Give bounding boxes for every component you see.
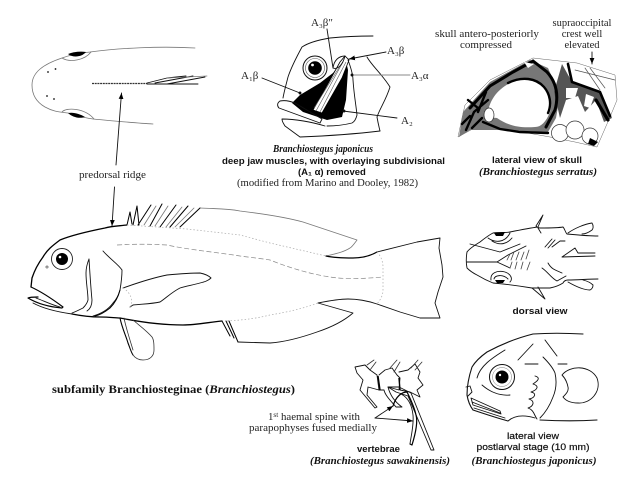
head outline — [283, 36, 373, 98]
upper jaw — [278, 101, 322, 123]
head outline — [32, 47, 195, 124]
eye — [52, 248, 72, 270]
preopercle and opercle outlines — [327, 57, 390, 131]
white muscle pad near eye — [333, 56, 345, 68]
species name: Branchiostegus japonicus — [272, 143, 373, 155]
skull pale body — [458, 58, 617, 147]
caption line 2: deep jaw muscles, with overlaying subdivisional — [222, 156, 445, 167]
arrow: predorsal ridge to fish — [112, 187, 114, 226]
lateral squiggles — [542, 239, 566, 281]
body outline upper — [31, 225, 127, 287]
species name: (Branchiostegus japonicus) — [472, 456, 596, 467]
caption line 2: postlarval stage (10 mm) — [476, 442, 590, 453]
label: A3 beta: A₃β — [387, 45, 405, 57]
eye — [303, 56, 327, 80]
note: supraoccipital crest: crest well — [562, 29, 602, 40]
nostril — [46, 266, 48, 268]
species name: (Branchiostegus sawakinensis) — [310, 456, 450, 467]
label: A1 beta: A₁β — [241, 70, 259, 82]
centrum thick edges — [378, 376, 400, 390]
head lines — [482, 340, 567, 421]
ventral fin — [120, 318, 154, 360]
label: A3 alpha: A₃α — [411, 70, 429, 82]
pectoral base — [123, 288, 132, 307]
operculum — [93, 251, 122, 316]
nostrils — [46, 68, 56, 100]
branchiostegal rays — [528, 376, 538, 419]
arrow: to parapophysis two — [375, 418, 413, 421]
mouth — [28, 287, 72, 314]
left and roof mottled region — [459, 60, 560, 137]
vertebra 1 — [355, 365, 379, 408]
note: compressed skull — [435, 29, 540, 51]
arrow: predorsal ridge to head view — [116, 93, 122, 165]
caption: dorsal view: dorsal view — [512, 306, 568, 317]
pectoral fin — [123, 273, 211, 307]
head outline — [467, 333, 597, 421]
dorsal fin base dotted — [127, 225, 326, 256]
caption line: lateral view of skull — [492, 155, 582, 166]
dark bones — [462, 61, 615, 133]
preoperculum — [72, 259, 92, 313]
head inner line — [466, 350, 505, 396]
dorsal fin — [562, 248, 595, 257]
tail base dotted — [377, 252, 383, 304]
title: subfamily: subfamily Branchiosteginae ( Branchiostegus ) — [52, 382, 295, 396]
illustration: jaw muscles — [241, 17, 429, 137]
upper neural spines — [367, 360, 422, 372]
caption: skull — [479, 155, 597, 178]
haemal spine — [393, 392, 417, 445]
lower eye — [491, 271, 511, 283]
note: supraoccipital crest: supraoccipital — [553, 18, 611, 29]
note: compressed skull: skull antero-posteriorly — [435, 29, 540, 40]
note: supraoccipital crest: elevated — [565, 40, 600, 51]
mouth — [471, 398, 505, 418]
back outline — [200, 208, 357, 256]
rear bone mass — [554, 64, 612, 122]
anal fin rays — [222, 321, 238, 342]
caption: postlarval stage — [472, 431, 596, 467]
ridge marks — [507, 250, 530, 270]
caption: jaw muscles — [222, 143, 445, 189]
midline and snout markings — [467, 244, 526, 268]
caption: vertebrae — [310, 444, 450, 467]
lower pectoral fin — [568, 280, 593, 290]
leader lines — [262, 29, 410, 118]
label: A2: A₂ — [401, 115, 413, 127]
eye — [490, 364, 514, 390]
label: parapophyses note: parapophyses fused medially — [249, 423, 378, 434]
note: compressed skull: compressed — [460, 40, 513, 51]
black jaw muscle — [292, 57, 348, 120]
outline — [467, 215, 598, 252]
long spine — [388, 387, 434, 450]
dorsal fin spines — [127, 204, 200, 227]
skull dark jaw details — [588, 138, 598, 146]
upper eye — [62, 52, 91, 60]
hatched muscle band — [313, 56, 349, 113]
illustration: skull — [458, 58, 617, 147]
tail fin — [238, 238, 443, 343]
upper pectoral fin — [568, 223, 593, 234]
label: haemal spine note: st — [273, 411, 278, 419]
arrow: crest — [591, 52, 593, 64]
arrow: to parapophysis one — [375, 406, 393, 418]
label: A3 beta double prime: A₃β″ — [311, 17, 333, 29]
lower bones white lobes — [484, 108, 598, 144]
source note: (modified from Marino and Dooley, 1982) — [237, 178, 418, 189]
species name: (Branchiostegus serratus) — [479, 167, 597, 178]
predorsal ridge and fin rays — [92, 76, 207, 84]
caption line 1: lateral view — [507, 431, 559, 442]
lower eye — [62, 109, 94, 119]
operculum — [540, 357, 556, 418]
lower jaw — [282, 119, 380, 137]
orbit opening — [487, 80, 551, 127]
label: haemal spine note: haemal spine with — [278, 412, 361, 423]
vertebra 2 — [379, 368, 402, 407]
illustration: vertebrae — [355, 360, 434, 450]
illustration: postlarval head — [466, 333, 598, 421]
caption line: vertebrae — [357, 444, 400, 455]
label: haemal spine note: 1 — [268, 412, 273, 423]
illustration: main fish, lateral view — [28, 204, 443, 360]
anal fin base dotted — [227, 303, 318, 321]
upper eye — [488, 232, 512, 244]
pectoral fin — [562, 368, 598, 403]
label: predorsal ridge: predorsal ridge — [79, 170, 146, 181]
illustration: dorsal view of head — [466, 215, 598, 299]
ventral spine — [532, 228, 545, 299]
caudal peduncle top — [326, 252, 377, 258]
lateral line — [117, 244, 383, 279]
crest window highlights — [524, 62, 594, 108]
belly — [72, 314, 222, 325]
illustration: head from above with predorsal ridge — [32, 47, 207, 124]
caption line 3: (A₁ α) removed — [298, 167, 366, 178]
vertebra 3 — [399, 364, 423, 397]
